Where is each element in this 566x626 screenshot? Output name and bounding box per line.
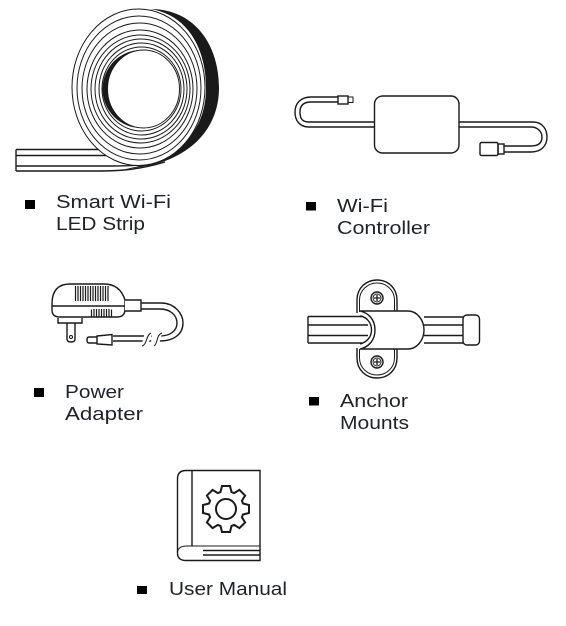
label: Wi-Fi Controller: Wi-Fi <box>337 196 388 216</box>
label: Power Adapter: Power <box>65 382 124 402</box>
label: User Manual: User Manual <box>169 579 287 599</box>
label: Anchor Mounts: Anchor <box>340 391 408 411</box>
label: User Manual <box>137 579 287 599</box>
label: Wi-Fi Controller: Controller <box>337 218 430 238</box>
icon: user manual <box>178 470 260 560</box>
label: Smart Wi-Fi LED Strip: LED Strip <box>56 214 145 234</box>
icon: Wi-Fi controller <box>295 96 547 156</box>
icon: power adapter <box>52 284 183 348</box>
label: Wi-Fi Controller <box>306 196 430 238</box>
label: Power Adapter <box>34 382 143 424</box>
label: Smart Wi-Fi LED Strip <box>25 192 171 234</box>
label: Smart Wi-Fi LED Strip: Smart Wi-Fi <box>56 192 171 212</box>
icon: anchor mount <box>308 280 480 378</box>
label: Anchor Mounts <box>309 391 409 433</box>
label: Power Adapter: Adapter <box>65 404 143 424</box>
icon: LED strip roll <box>16 9 219 171</box>
label: Anchor Mounts: Mounts <box>340 413 409 433</box>
